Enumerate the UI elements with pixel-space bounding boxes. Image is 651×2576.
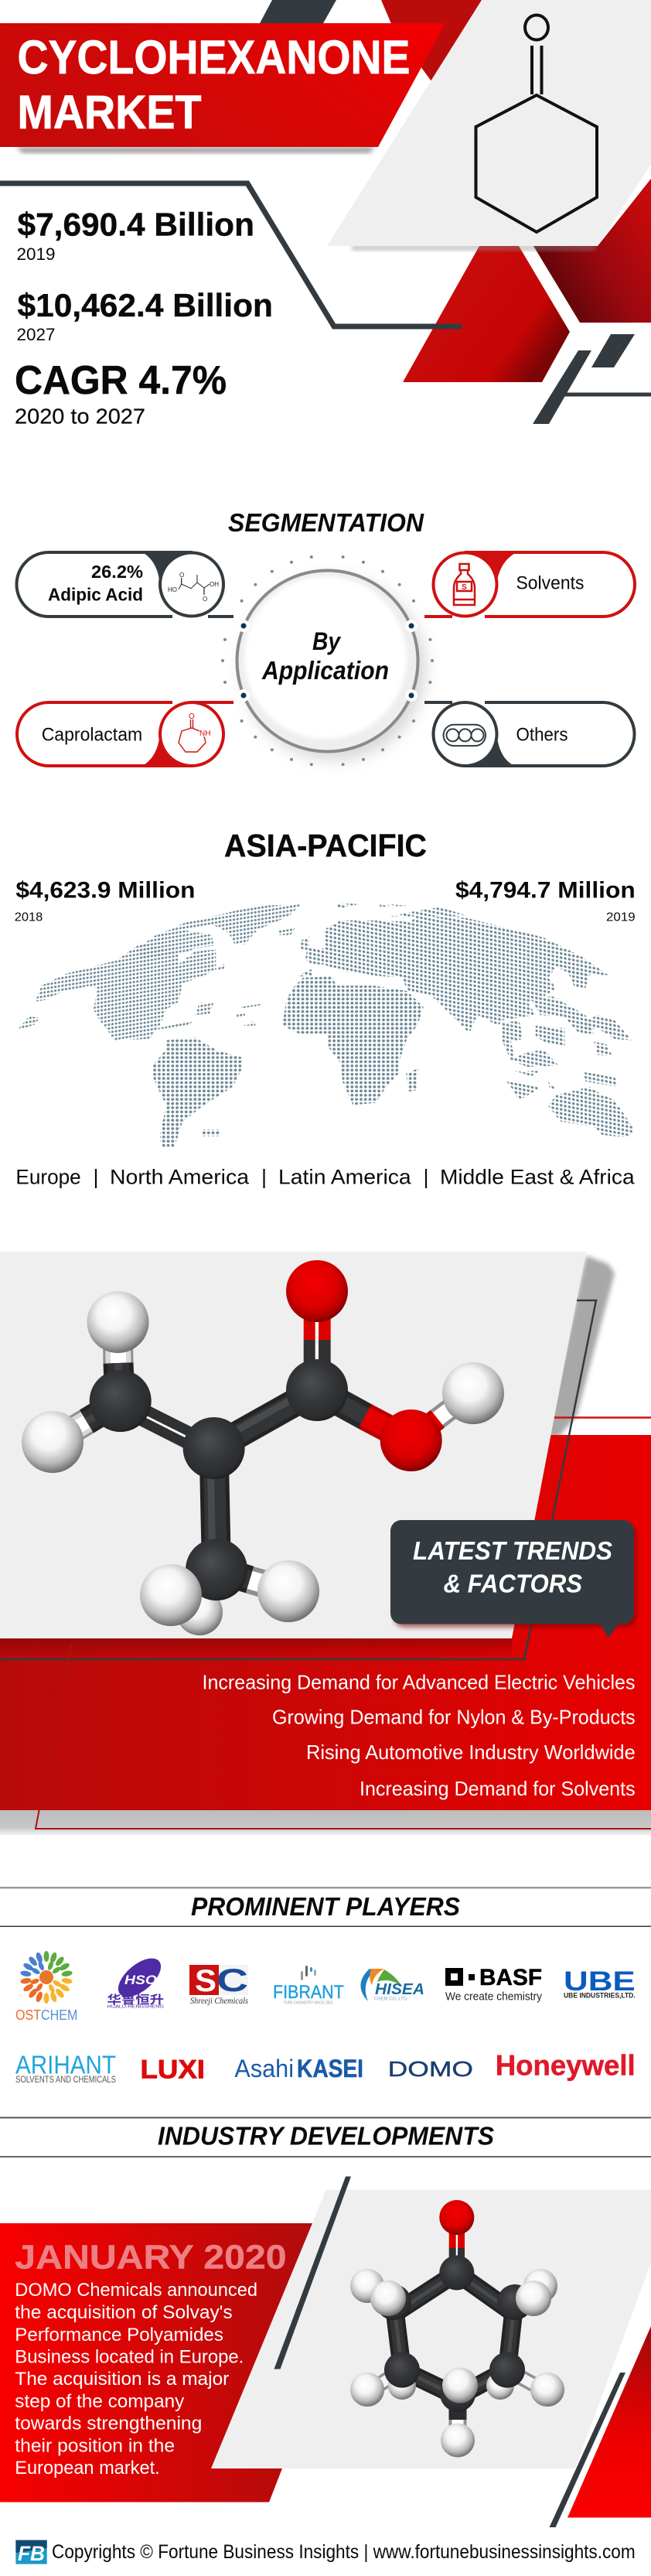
cyclohexanone structure icon: [476, 15, 597, 232]
C=O double bond: [304, 1311, 331, 1386]
logo: asahi kasei: KASEI: [297, 2055, 363, 2082]
dark accent line: [564, 393, 651, 396]
pill: solvents: [424, 551, 635, 618]
description: Business located in Europe.: [15, 2347, 244, 2367]
other regions list: Middle East & Africa: [440, 1166, 636, 1189]
asia-pacific values: 2018: [15, 911, 43, 924]
trend list: Increasing Demand for Advanced Electric Vehicles: [203, 1671, 636, 1694]
africa: [282, 976, 424, 1105]
logo: asahi kasei: Asahi: [234, 2055, 294, 2082]
description: their position in the: [15, 2435, 175, 2457]
market values: 2020 to 2027: [15, 405, 145, 429]
C=C double bond: [132, 1403, 201, 1447]
C-H top: white then dark: [118, 1338, 120, 1402]
C-C single bond: [212, 1386, 317, 1448]
logo: shreeji chemicals: Shreeji Chemicals: [190, 1995, 248, 2006]
icon: caprolactam molecule: O: [189, 712, 195, 721]
dark outline: [0, 1300, 596, 1659]
banner shadow: [15, 147, 375, 153]
2018 value: $4,623.9 Million: [15, 877, 195, 904]
pill: adipic acid: 26.2%: [91, 562, 143, 582]
centre label: [261, 627, 389, 685]
logos row 2: [15, 2050, 636, 2085]
heading: segmentation: SEGMENTATION: [228, 508, 424, 537]
C-C down bond: [210, 1448, 216, 1570]
C-H lower right bond: [216, 1570, 278, 1588]
market values: [15, 206, 273, 429]
logo: fibrant: PURE CHEMISTRY SINCE 1953: [284, 2001, 332, 2006]
logo: arihant: ARIHANT: [15, 2051, 116, 2079]
description: European market.: [15, 2458, 160, 2479]
molecule: methacrylic acid: [22, 1260, 504, 1635]
pill: others: Others: [516, 725, 567, 746]
dark accent slant 1: [591, 334, 635, 367]
description: Performance Polyamides: [15, 2325, 223, 2345]
pill: others: [424, 701, 634, 767]
logo: ostchem: [15, 1951, 77, 2023]
logo: hisea: CHEM CO.,LTD: [374, 1997, 407, 2002]
pill: adipic acid: [16, 551, 233, 618]
asia-pacific values: [15, 877, 636, 924]
grey panel shadow: [352, 244, 595, 251]
icon: bottle: S: [462, 583, 467, 592]
red corner: [567, 2326, 651, 2517]
trend list: Growing Demand for Nylon & By-Products: [272, 1705, 636, 1728]
logo: shreeji chemicals: [189, 1962, 248, 2006]
bonds: [379, 2232, 537, 2431]
grey molecule panel: [327, 0, 651, 246]
centre label: Application: [261, 656, 389, 685]
atoms: [388, 2372, 416, 2400]
madagascar: [406, 1068, 418, 1092]
logo: asahi kasei: [234, 2055, 363, 2082]
other regions list: |: [261, 1166, 267, 1189]
logo: basf: We create chemistry: [445, 1990, 542, 2004]
logo: hualu-hengsheng: 华鲁恒升: [107, 1993, 164, 2007]
trend list: Rising Automotive Industry Worldwide: [306, 1741, 636, 1764]
south america: [152, 1037, 243, 1148]
other regions list: |: [424, 1166, 429, 1189]
footer: [15, 2540, 636, 2565]
logo: basf: [445, 1965, 542, 2004]
icon: bottle: [454, 564, 475, 605]
heading: asia-pacific: ASIA-PACIFIC: [224, 828, 427, 863]
bonds: [60, 1311, 464, 1588]
description: step of the company: [15, 2391, 184, 2412]
logo: hualu-hengsheng: HSO: [124, 1973, 157, 1987]
red text panel: [0, 2223, 312, 2502]
description: [15, 2280, 257, 2479]
dark connector line: [0, 183, 462, 326]
logo: hualu-hengsheng: [107, 1951, 168, 2010]
date heading: JANUARY 2020: [15, 2239, 287, 2277]
panel: industry development: [0, 2177, 651, 2527]
outer dots ring: [221, 555, 434, 766]
red band: [0, 1435, 651, 1810]
logo: hisea: [360, 1969, 424, 2002]
description: towards strengthening: [15, 2414, 202, 2434]
logo: domo: DOMO: [388, 2057, 473, 2081]
trend list: Increasing Demand for Solvents: [360, 1777, 636, 1800]
panel: latest trends: [0, 1252, 651, 1835]
shadow of grey panel: [545, 1256, 615, 1437]
market values: 2019: [17, 244, 56, 264]
dark red corner shape: [381, 0, 482, 81]
falklands: [201, 1129, 220, 1136]
other regions list: Europe: [15, 1166, 81, 1189]
trend list: [203, 1671, 636, 1800]
other regions list: |: [93, 1166, 99, 1189]
dark red right block: [533, 179, 651, 323]
north america: [16, 904, 301, 1040]
title banner: [0, 23, 445, 153]
bottom grey strip: [0, 1810, 651, 1835]
logo: ostchem: OSTCHEM: [15, 2007, 77, 2023]
heading: industry developments: INDUSTRY DEVELOPMENTS: [158, 2122, 494, 2151]
logo: luxi: LUXI: [141, 2055, 205, 2085]
dark stripe top: [260, 0, 336, 23]
icon: adipic molecule: O: [203, 596, 207, 603]
CAGR: CAGR 4.7%: [15, 358, 227, 403]
dark slant left: [274, 2177, 351, 2369]
icon: caprolactam molecule: [179, 712, 210, 752]
C-O single bond: [317, 1390, 411, 1440]
C-H left: white then dark: [60, 1401, 121, 1437]
centre circle: [237, 571, 425, 760]
pill: adipic acid: Adipic Acid: [48, 585, 143, 605]
dark accent slant 2: [533, 350, 591, 424]
description: DOMO Chemicals announced: [15, 2280, 257, 2301]
logo: ube: UBE: [564, 1966, 636, 1997]
other regions list: North America: [110, 1166, 250, 1189]
callout: & FACTORS: [444, 1570, 582, 1598]
logos row 1: [15, 1951, 636, 2023]
description: The acquisition is a major: [15, 2369, 229, 2390]
pill: caprolactam: [17, 701, 233, 767]
logo: shreeji chemicals: S: [195, 1964, 216, 1998]
logo: shreeji chemicals: C: [216, 1962, 248, 1998]
asia-pacific values: 2019: [606, 911, 636, 924]
eurasia and oceania: [299, 904, 635, 1137]
molecule: cyclohexanone: [350, 2200, 564, 2457]
pill: solvents: Solvents: [516, 573, 585, 594]
2027 value: $10,462.4 Billion: [17, 287, 273, 323]
centre label: By: [312, 627, 342, 655]
icon: adipic molecule: [168, 572, 219, 603]
pill: caprolactam: Caprolactam: [42, 725, 142, 746]
other regions list: Latin America: [278, 1166, 412, 1189]
logo: basf: BASF: [479, 1965, 542, 1990]
grey molecule panel: [0, 1252, 586, 1638]
logo: hisea: HISEA: [375, 1981, 424, 1998]
logo: ube: UBE INDUSTRIES,LTD.: [564, 1992, 636, 2000]
callout: LATEST TRENDS: [413, 1536, 612, 1565]
other regions list: [15, 1166, 636, 1189]
O-H bond: [411, 1399, 464, 1440]
callout: [390, 1520, 637, 1638]
2019 value: $4,794.7 Million: [455, 877, 636, 904]
atoms: [176, 1589, 223, 1635]
heading: prominent players: PROMINENT PLAYERS: [191, 1892, 460, 1921]
logo: honeywell: Honeywell: [496, 2050, 636, 2082]
dark red outline: [36, 1644, 651, 1829]
icon: three rings: [444, 725, 486, 746]
header graphics: [0, 0, 651, 424]
title text: CYCLOHEXANONE: [17, 31, 410, 84]
logo: fibrant: [273, 1966, 344, 2006]
icon: adipic molecule: HO: [168, 586, 177, 593]
dark slant right: [549, 2373, 625, 2527]
description: the acquisition of Solvay's: [15, 2302, 233, 2323]
market values: 2027: [17, 325, 56, 344]
icon: fortune business insights logo: FB: [18, 2542, 45, 2565]
icon: adipic molecule: OH: [210, 581, 219, 588]
grey panel: [211, 2190, 651, 2468]
title banner: MARKET: [17, 86, 201, 138]
logo: fibrant: FIBRANT: [273, 1982, 344, 2003]
logo: hualu-hengsheng: HUALU-HENGSHENG: [107, 2005, 164, 2010]
thin red line: [554, 1416, 651, 1419]
red triangle block: [403, 246, 570, 382]
logo: arihant: SOLVENTS AND CHEMICALS: [15, 2074, 116, 2085]
segmentation diagram: [16, 551, 635, 767]
icon: adipic molecule: O: [179, 572, 184, 579]
banner shape: [0, 23, 445, 147]
dotted world map: [16, 904, 635, 1148]
2019 value: $7,690.4 Billion: [17, 206, 254, 243]
icon: caprolactam molecule: NH: [199, 729, 210, 738]
band shade: [0, 1638, 512, 1659]
